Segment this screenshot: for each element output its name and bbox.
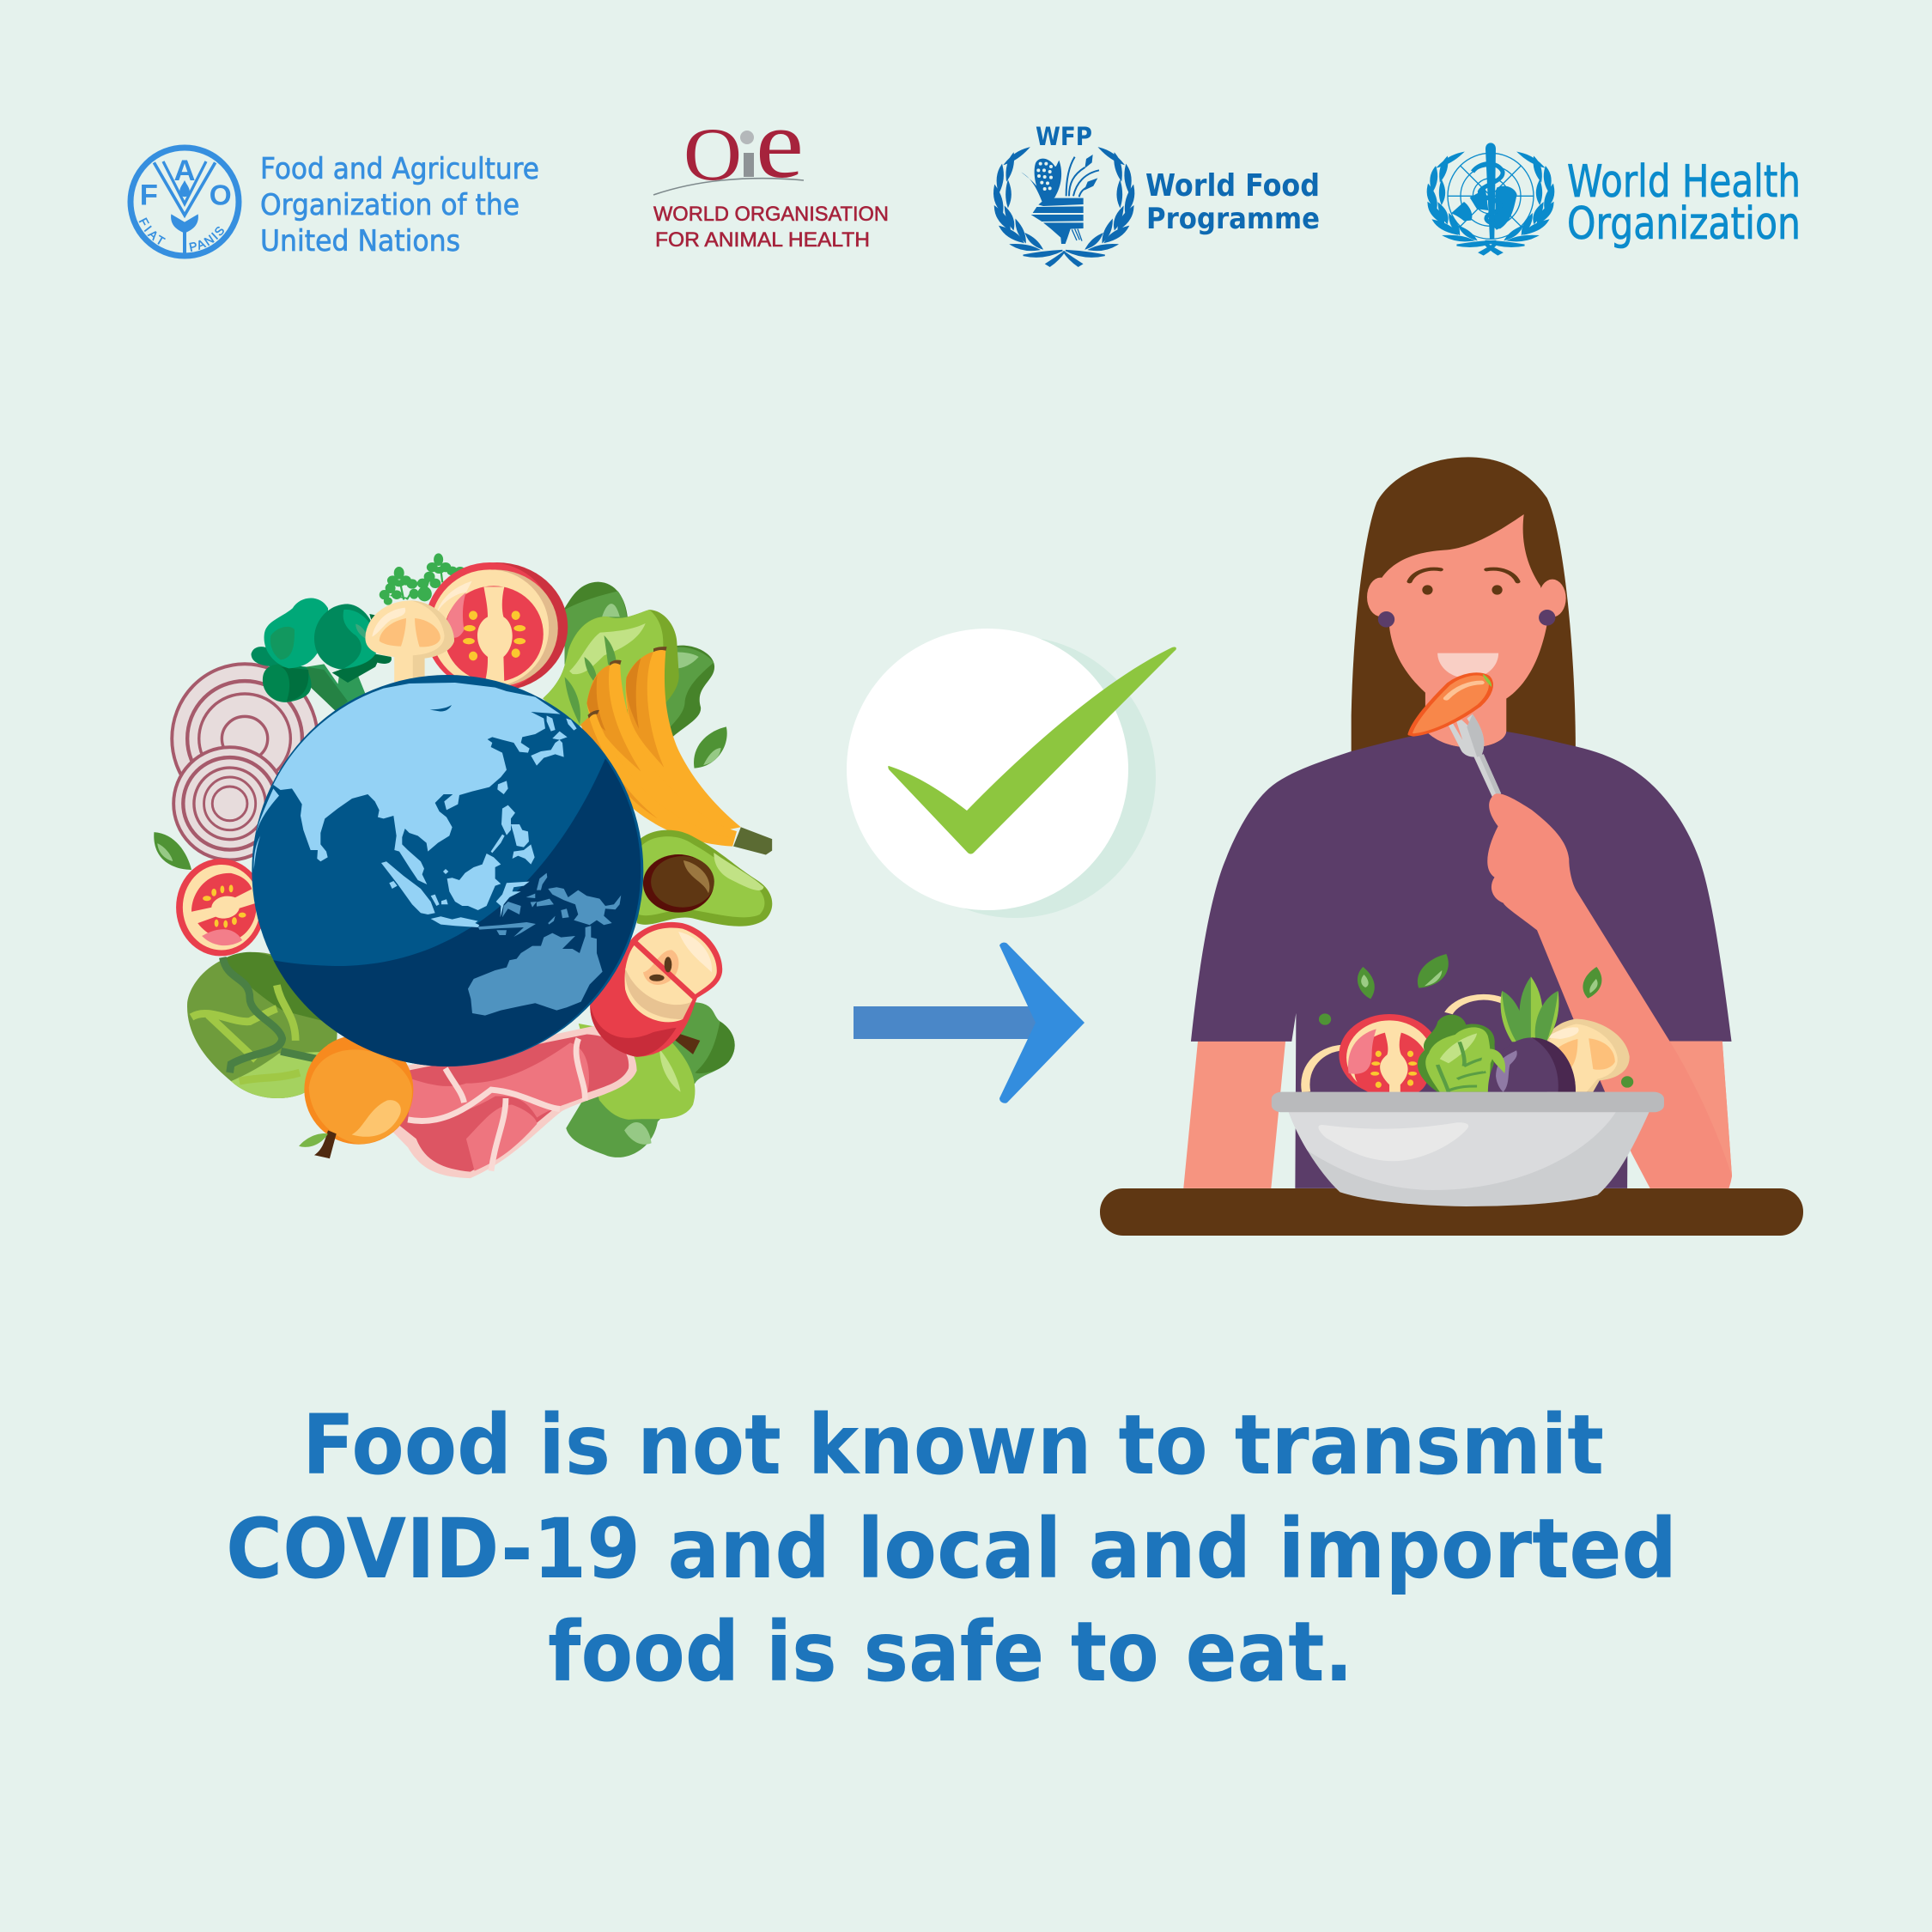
bowl highlight: [1318, 1122, 1468, 1161]
bowl body: [1289, 1112, 1649, 1206]
shaded eastern islands: [478, 873, 569, 937]
meat: [392, 1025, 637, 1178]
arrow: [854, 943, 1084, 1103]
headline: food is safe to eat.: [548, 1604, 1353, 1700]
check mark badge: [847, 629, 1176, 918]
FAO name: United Nations: [260, 224, 460, 258]
WHO name: [1567, 156, 1801, 250]
WFP emblem: [994, 149, 1133, 266]
WFP acronym: WFP: [1036, 122, 1092, 151]
leaf right: [694, 726, 727, 769]
badge shadow: [874, 636, 1156, 918]
logo: FAO: [127, 144, 539, 259]
New Guinea: [548, 887, 621, 925]
OIE wordmark: O: [683, 113, 742, 197]
Borneo: [447, 854, 501, 910]
night shadow: [273, 758, 641, 1066]
small leaf sprig: [1481, 1049, 1505, 1073]
tomato slice top: [425, 562, 568, 691]
FAO emblem: FIAT: [139, 217, 166, 245]
WHO name: Organization: [1567, 198, 1801, 250]
Sulawesi: [496, 882, 530, 917]
WFP name: [1145, 168, 1320, 236]
ears: [1367, 578, 1566, 617]
hair: [1352, 457, 1576, 754]
woman eating illustration: [1183, 457, 1732, 1188]
Australia: [468, 926, 603, 1016]
leaves upper: [1358, 954, 1601, 999]
headline: Food is not known to transmit: [302, 1397, 1604, 1493]
bowl rim: [1272, 1092, 1664, 1112]
mouth: [1437, 653, 1498, 678]
OIE name: FOR ANIMAL HEALTH: [655, 228, 870, 252]
face: [1382, 514, 1547, 702]
logo: WFP: [994, 122, 1320, 266]
mushroom: [365, 600, 454, 684]
ocean: [252, 675, 643, 1066]
eyes: [1422, 585, 1503, 595]
Java: [431, 916, 479, 927]
arm highlight: [1670, 1042, 1732, 1176]
left arm: [1183, 1041, 1285, 1188]
logo: OIE: [653, 89, 889, 252]
bowl lighter face: [1289, 1112, 1616, 1190]
carrot on fork: [1410, 674, 1492, 735]
west slice land: [254, 788, 279, 870]
FAO name: [260, 152, 539, 258]
cabbage: [187, 952, 337, 1098]
logo: WHO: [1428, 143, 1801, 254]
avocado: [637, 830, 772, 927]
OIE wordmark: e: [756, 89, 804, 199]
banana bunch: [580, 647, 772, 855]
peas: [1319, 1013, 1633, 1088]
neck: [1425, 681, 1506, 748]
FAO emblem: A: [173, 155, 196, 187]
apple: [590, 922, 722, 1057]
right arm and hand: [1487, 793, 1732, 1188]
small tomato slice: [176, 859, 265, 956]
orange: [299, 1035, 413, 1158]
parsley: [380, 553, 465, 605]
lettuce bottom right: [566, 1002, 735, 1157]
Philippines: [491, 805, 535, 865]
FAO name: Food and Agriculture: [260, 152, 539, 186]
Japan and north islands: [531, 715, 577, 766]
eyebrows: [1410, 569, 1518, 581]
Taiwan: [497, 781, 508, 794]
back lettuce top right: [543, 582, 714, 738]
Sumatra and nearby islands: [381, 861, 448, 914]
eggplant: [1488, 1037, 1576, 1092]
globe: [252, 675, 643, 1066]
OIE wordmark: [653, 89, 804, 199]
leaf left: [154, 832, 191, 870]
green check: [888, 647, 1176, 854]
salad bowl: [1272, 954, 1664, 1206]
WFP name: World Food: [1145, 168, 1320, 204]
FAO emblem: F: [140, 179, 158, 212]
onion rings: [1305, 997, 1505, 1092]
FAO emblem: O: [210, 180, 232, 212]
OIE name: [653, 203, 889, 252]
earrings: [1378, 610, 1555, 628]
headline: COVID-19 and local and imported: [226, 1501, 1677, 1597]
FAO emblem: PANIS: [189, 227, 224, 252]
white circle: [847, 629, 1128, 910]
WHO emblem: [1428, 143, 1553, 254]
WHO name: World Health: [1567, 156, 1801, 208]
mushroom: [1547, 1019, 1630, 1092]
broccoli: [252, 598, 392, 711]
WFP name: Programme: [1146, 202, 1320, 236]
OIE name: WORLD ORGANISATION: [653, 203, 889, 226]
salad: [1305, 954, 1633, 1097]
food around the globe illustration: [154, 553, 772, 1178]
lake: [430, 705, 452, 712]
FAO emblem: [127, 144, 242, 259]
onion slices: [172, 664, 318, 860]
tomato: [1339, 1014, 1440, 1097]
shirt: [1191, 732, 1732, 1188]
fork: [1449, 714, 1501, 797]
table: [1100, 1188, 1803, 1236]
headline: [226, 1397, 1677, 1700]
green sprout: [1501, 976, 1558, 1042]
lettuce: [1418, 1015, 1495, 1092]
Asia land mass: [271, 683, 561, 884]
FAO name: Organization of the: [260, 188, 519, 222]
